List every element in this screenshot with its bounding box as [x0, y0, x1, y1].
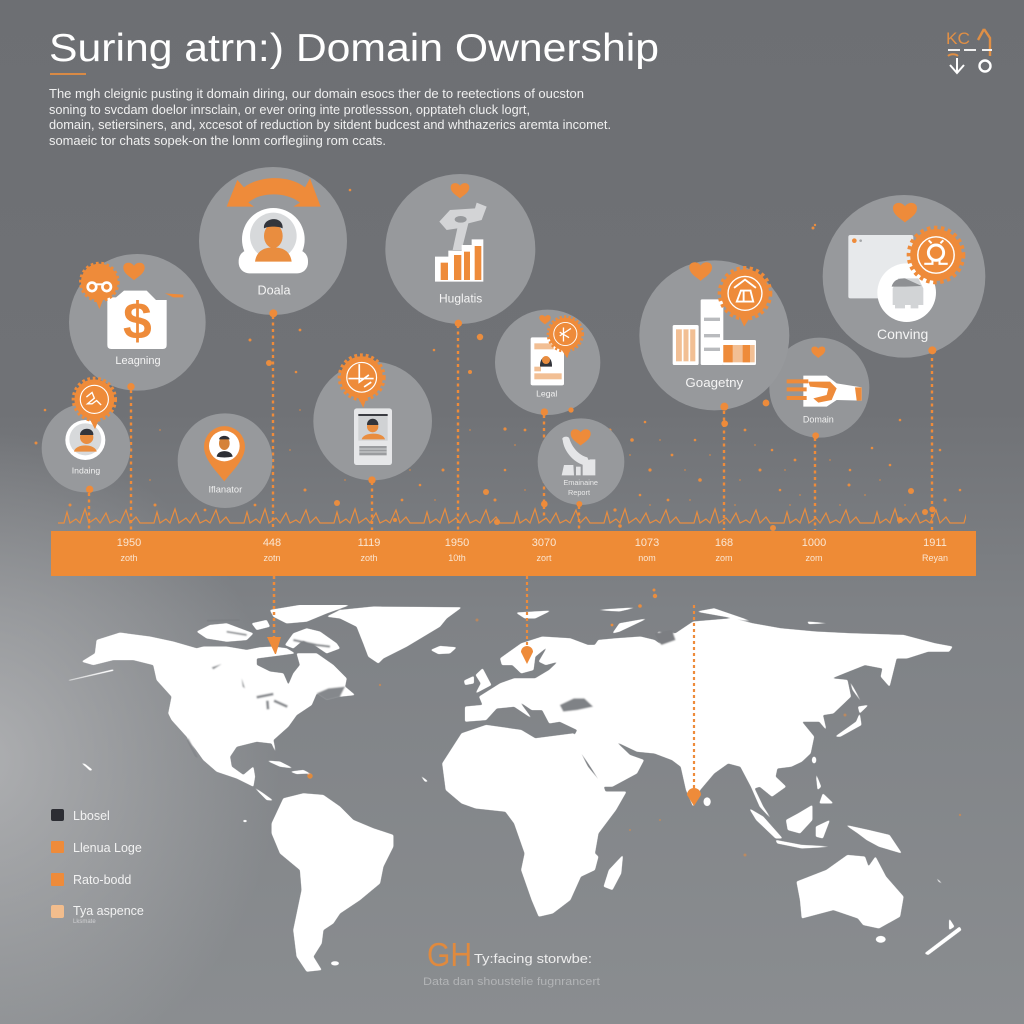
- footer brand: Data dan shoustelie fugnrancert: [423, 976, 600, 988]
- timeline bar: zom: [805, 553, 823, 563]
- intro paragraph: [49, 87, 611, 148]
- icon: dash: [165, 293, 183, 297]
- icon: dollar document: $: [123, 291, 152, 349]
- timeline bar: nom: [638, 553, 656, 563]
- panel: conving: [823, 195, 985, 358]
- icon: gear tool: [439, 203, 487, 250]
- icon: id card: [354, 408, 392, 465]
- timeline bar: 448: [263, 537, 281, 549]
- label: Report: [568, 488, 590, 497]
- panel: iflanator: [178, 413, 272, 508]
- timeline bar: zotn: [263, 553, 281, 563]
- connector node: [127, 383, 135, 390]
- timeline bar: zoth: [120, 553, 138, 563]
- connector nodes: [720, 403, 728, 411]
- map connector: india: [687, 605, 701, 806]
- label: Domain: [803, 415, 834, 425]
- icon: badge: [74, 379, 115, 429]
- connector node: [812, 432, 819, 439]
- timeline bar: 1119: [358, 537, 380, 549]
- icon: profile card: [531, 337, 564, 385]
- legend item: Lksmate: [73, 919, 96, 925]
- panel group right scale: [495, 195, 985, 512]
- icon: badge: [340, 356, 383, 408]
- americas: [66, 605, 462, 972]
- connector node: [86, 486, 93, 493]
- panel: leagning: [69, 254, 206, 391]
- timeline bar: 168: [715, 537, 733, 549]
- panel: id card: [313, 356, 432, 484]
- label: Goagetny: [685, 375, 744, 390]
- intro paragraph: soning to svcdam doelor inrsclain, or ever oring inte protlessson, opptateh cluck logrt,: [49, 103, 530, 117]
- scattered data particles: [34, 189, 961, 856]
- icon: heart: [893, 203, 917, 222]
- panel: report: [538, 418, 624, 507]
- icon: bar chart: [435, 239, 483, 282]
- panel: huglatis: [385, 174, 535, 327]
- footer brand: GH: [427, 936, 472, 973]
- legend item: Llenua Loge: [73, 841, 142, 855]
- connector nodes: [576, 501, 582, 507]
- icon: heart: [539, 315, 551, 324]
- icon: battery and buildings: [673, 299, 756, 365]
- legend item: Rato-bodd: [73, 873, 131, 887]
- world map: [66, 605, 961, 972]
- panel group upper left scale: [42, 167, 535, 508]
- icon: phone and bars: [562, 437, 595, 475]
- label: Doala: [257, 283, 291, 297]
- map connector: scandinavia: [521, 576, 533, 664]
- europe asia africa oceania: [442, 607, 961, 955]
- timeline bar: zom: [715, 553, 733, 563]
- connector node: [455, 320, 462, 327]
- map connector: north america: [267, 576, 281, 654]
- icon: hand plug: [787, 376, 862, 407]
- legend: [51, 809, 144, 925]
- label: Leagning: [115, 355, 161, 367]
- title: Suring atrn:) Domain Ownership: [49, 27, 659, 70]
- logo: KC: [946, 29, 970, 48]
- timeline bar: zort: [536, 553, 552, 563]
- timeline bar: 1073: [635, 537, 659, 549]
- label: Iflanator: [208, 484, 242, 494]
- footer brand: Ty:facing storwbe:: [474, 951, 592, 966]
- footer brand: [423, 936, 600, 988]
- panel: legal: [495, 310, 600, 416]
- icon: avatar: [65, 420, 105, 460]
- icon: badge: [720, 269, 770, 327]
- connector lines from circles to timeline: [89, 316, 932, 530]
- title underline: [50, 73, 86, 75]
- timeline bar: 1911: [923, 537, 947, 549]
- label: Huglatis: [439, 292, 482, 306]
- icon: heart: [123, 263, 145, 280]
- timeline bar: 1950: [445, 537, 469, 549]
- connector node: [269, 309, 277, 317]
- node: [568, 407, 574, 413]
- panel: doala: [199, 167, 347, 317]
- panel: indaing: [42, 379, 130, 493]
- icon: swap arrow: [227, 178, 321, 207]
- seismic timeline trace: [58, 504, 966, 528]
- intro paragraph: domain, setiersiners, and, xccesot of reduction by sitdent budcest and whthazerics aremta incomet.: [49, 118, 611, 132]
- logo: [946, 29, 992, 73]
- intro paragraph: somaeic tor chats sopek-on the lonm corflegiing rom ccats.: [49, 134, 386, 148]
- icon: window: [848, 235, 913, 298]
- legend item: Lbosel: [73, 809, 110, 823]
- icon: badge: [910, 229, 962, 281]
- label: Emainaine: [563, 478, 598, 487]
- legend item: Tya aspence: [73, 904, 144, 918]
- icon: badge: [80, 263, 118, 309]
- timeline bar: 1950: [117, 537, 141, 549]
- legend item: [51, 904, 144, 925]
- icon: heart: [811, 347, 825, 358]
- timeline bar: zoth: [360, 553, 378, 563]
- timeline bar: Reyan: [922, 553, 948, 563]
- label: Conving: [877, 326, 928, 342]
- label: Indaing: [72, 465, 100, 475]
- panel: domain: [769, 338, 869, 439]
- icon: heart: [571, 429, 591, 446]
- intro paragraph: The mgh cleignic pusting it domain diring, our domain esocs ther de to reetections of oucston: [49, 87, 584, 101]
- icon: badge: [549, 317, 582, 358]
- timeline bar: 10th: [448, 553, 466, 563]
- label: [563, 478, 598, 497]
- timeline bar: 1000: [802, 537, 826, 549]
- icon: heart: [689, 262, 712, 281]
- connector node: [541, 408, 548, 416]
- timeline bar: [51, 531, 976, 576]
- connector node: [928, 346, 936, 354]
- icon: heart: [451, 183, 469, 198]
- icon: avatar: [239, 208, 308, 273]
- icon: car circle: [877, 263, 936, 322]
- panel: goagetny: [639, 260, 789, 411]
- timeline bar: 3070: [532, 537, 556, 549]
- label: Legal: [536, 389, 557, 399]
- icon: map pin: [204, 426, 245, 481]
- connector node: [368, 476, 376, 484]
